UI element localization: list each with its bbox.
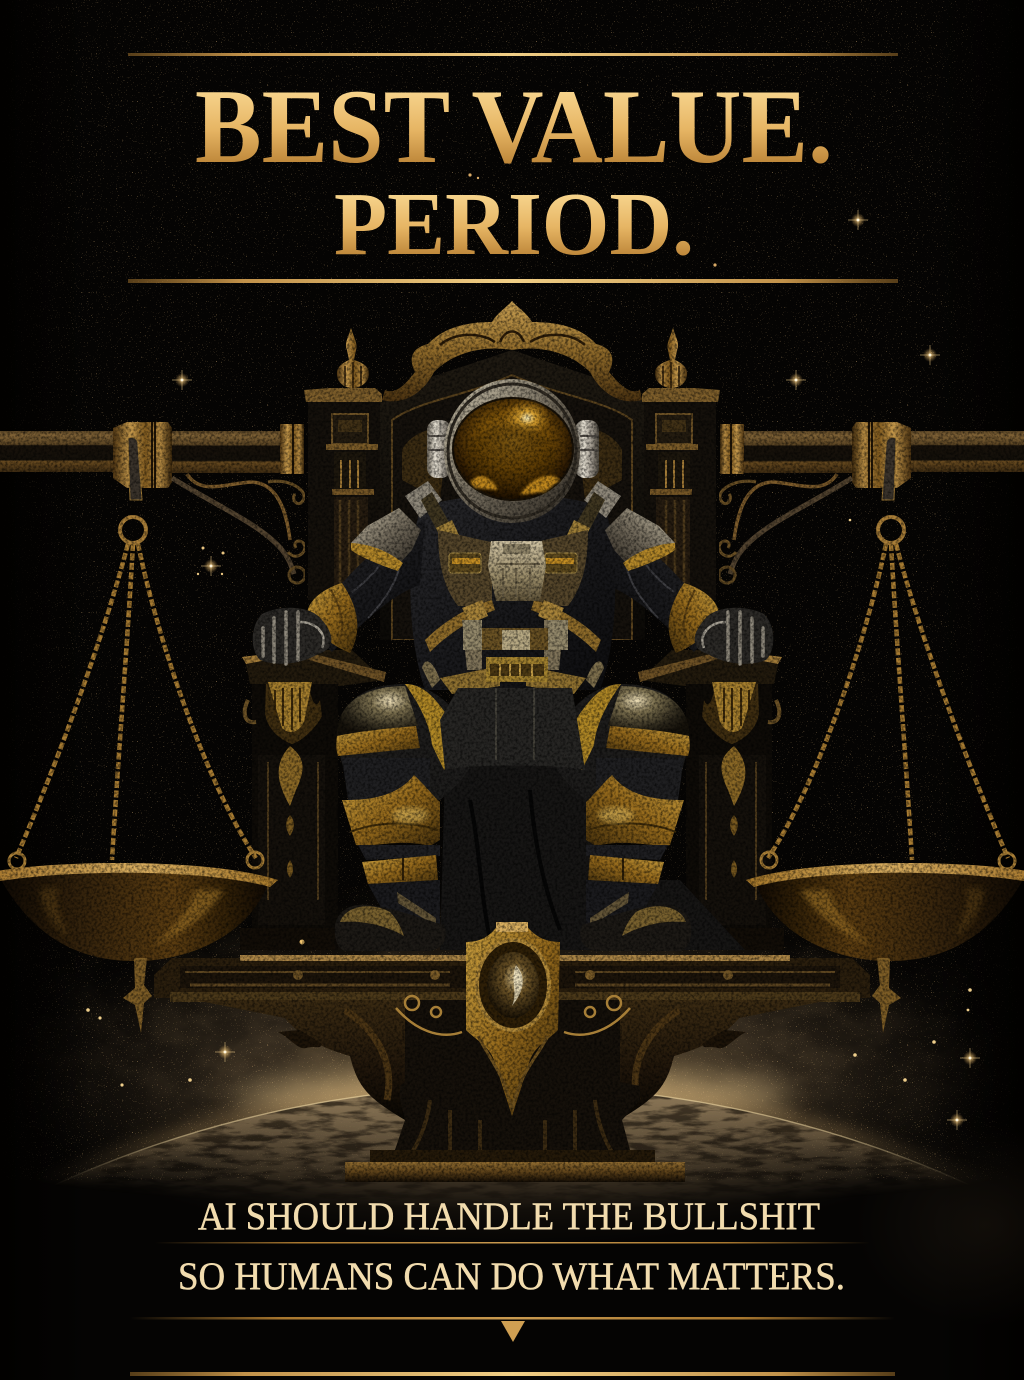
throne sides: right: [638, 328, 784, 950]
ornate crest: [382, 301, 642, 401]
triangle marker: [501, 1321, 525, 1342]
balance scale: right arm and pan: [719, 422, 1024, 1033]
helmet side pads: [427, 420, 599, 478]
title line one: BEST VALUE.: [195, 68, 833, 185]
cloth drape: [440, 764, 745, 950]
ornate corbel right: [564, 1000, 829, 1120]
pedestal: [345, 1000, 685, 1182]
waist belt: [463, 620, 568, 682]
ornate corbel left: [195, 1000, 460, 1120]
left limbs: [253, 481, 500, 951]
gold medallion: [466, 922, 560, 1116]
balance scale: left arm and pan: [0, 422, 305, 1033]
caption divider: [155, 1242, 870, 1244]
sparkle stars: [86, 173, 980, 1130]
chest plate: [488, 541, 546, 601]
lower title rule: [128, 279, 898, 283]
scrollwork: [396, 996, 630, 1035]
caption line one: AI SHOULD HANDLE THE BULLSHIT: [198, 1195, 820, 1238]
torso: [410, 495, 615, 690]
caption line two: SO HUMANS CAN DO WHAT MATTERS.: [178, 1255, 845, 1298]
caption: [178, 1195, 845, 1298]
top rule: [128, 53, 898, 56]
throne sides: left: [240, 328, 386, 950]
bottom rule: [130, 1372, 895, 1376]
lower caption rule: [130, 1317, 895, 1320]
throne backrest: [380, 301, 645, 640]
title line two: PERIOD.: [334, 175, 694, 274]
title: [195, 68, 833, 274]
right limbs: [526, 481, 773, 951]
visor: [453, 398, 573, 500]
astronaut: [253, 379, 773, 951]
throne platform: [154, 955, 870, 1002]
planet horizon: [60, 1057, 1024, 1266]
helmet shell: [444, 379, 580, 523]
pelvis: [440, 688, 585, 770]
